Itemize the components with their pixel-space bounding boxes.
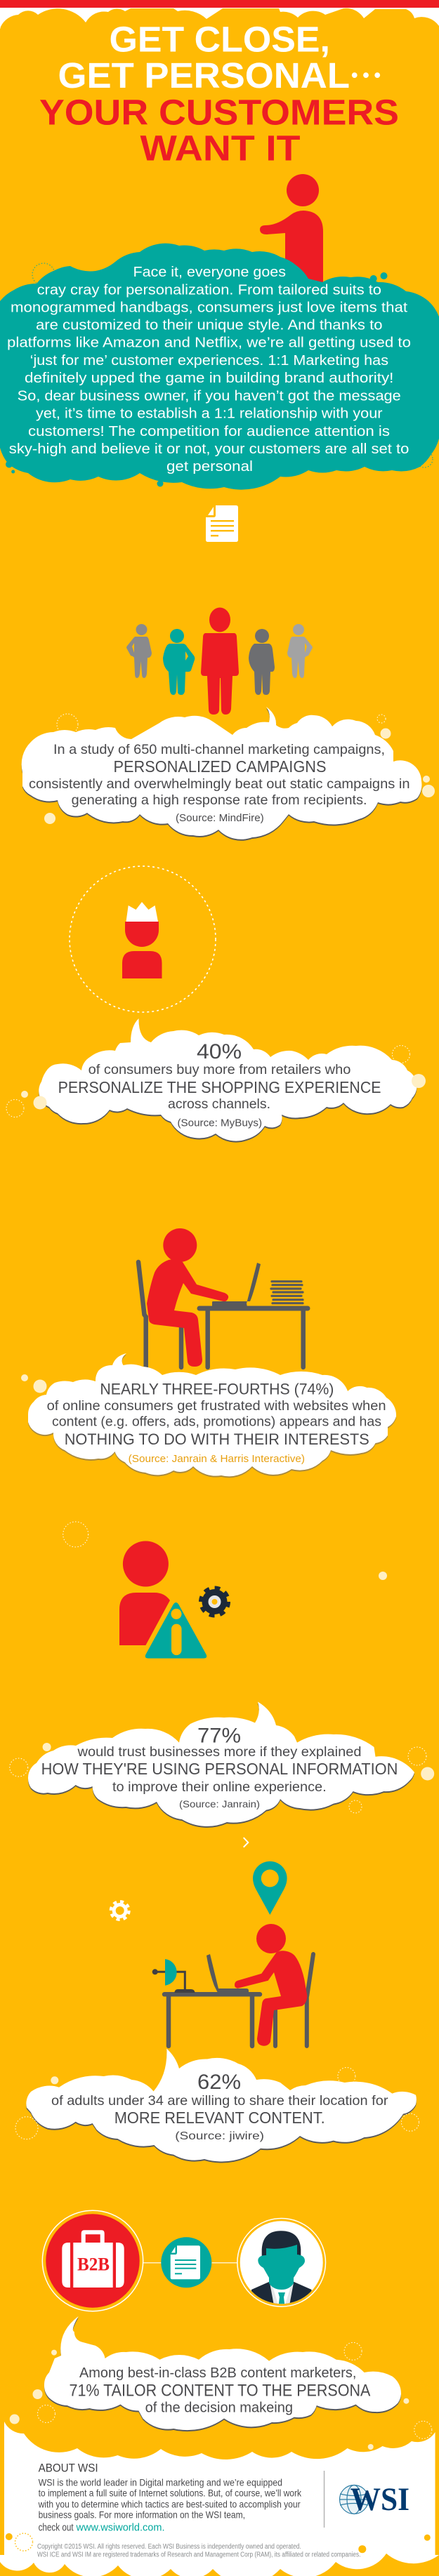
cloud text — [47, 1380, 386, 1465]
decorative dots: campaigns cloud — [44, 714, 435, 824]
face and neck — [258, 2245, 305, 2290]
copyright — [37, 2543, 360, 2558]
cloud text: to improve their online experience. — [112, 1779, 327, 1795]
intro paragraph: Face it, everyone goes — [133, 265, 286, 280]
suit — [251, 2281, 312, 2304]
diagram: B2B to document to persona — [42, 2210, 326, 2311]
cloud text: HOW THEY'RE USING PERSONAL INFORMATION — [41, 1760, 398, 1778]
title: WANT IT — [140, 128, 301, 168]
about paragraph: www.wsiworld.com. — [76, 2522, 164, 2534]
cloud text — [51, 2071, 388, 2142]
warning triangle — [145, 1602, 207, 1659]
about paragraph: WSI is the world leader in Digital marketing and we’re equipped — [39, 2477, 282, 2488]
person: gray left — [126, 624, 152, 678]
decorative dots: 62% cloud — [15, 2068, 419, 2139]
icon: teal location pin — [253, 1861, 287, 1915]
cloud text: 40% — [197, 1040, 242, 1063]
cloud text: PERSONALIZED CAMPAIGNS — [114, 757, 326, 776]
cloud text: (Source: MindFire) — [176, 812, 264, 824]
cloud text: 71% TAILOR CONTENT TO THE PERSONA — [69, 2381, 370, 2401]
intro paragraph: customers! The competition for audience attention is — [28, 424, 390, 439]
cloud text: would trust businesses more if they explained — [77, 1744, 361, 1760]
person: red — [201, 608, 239, 715]
cloud text: of consumers buy more from retailers who — [89, 1062, 351, 1077]
panel: 62% cloud — [26, 2049, 417, 2162]
person — [235, 1924, 307, 2046]
shirt — [270, 2283, 294, 2304]
logo: WSI globe: WSI — [350, 2481, 409, 2518]
decorative yellow dots on footer — [6, 2533, 431, 2553]
cloud text: NEARLY THREE-FOURTHS (74%) — [100, 1380, 334, 1398]
copyright: WSI ICE and WSI IM are registered trademarks of Research and Management Corp (RAM), its affiliated or related companies. — [37, 2551, 360, 2558]
icon: person at desk with laptop and books — [138, 1228, 308, 1367]
icon: white gear — [111, 1901, 129, 1920]
cloud text: 77% — [197, 1724, 241, 1748]
cloud text: 62% — [197, 2071, 241, 2094]
panel: 40% cloud — [39, 1018, 417, 1141]
about paragraph: to implement a full suite of Internet solutions. But, of course, we’ll work — [39, 2488, 302, 2499]
title — [39, 20, 399, 168]
person: light gray right — [287, 624, 313, 678]
about paragraph: with you to determine which tactics are best-suited to accomplish your — [38, 2498, 301, 2509]
decorative dots: three-fourths cloud — [21, 1374, 387, 1580]
icon: teal document circle — [161, 2237, 211, 2288]
cloud text: of online consumers get frustrated with websites when — [47, 1398, 386, 1414]
desk — [199, 1308, 308, 1367]
laptop — [212, 1263, 261, 1307]
intro paragraph: So, dear business owner, if you haven’t got the message — [18, 389, 401, 404]
person — [147, 1228, 228, 1367]
panel: 77% cloud — [28, 1701, 414, 1826]
panel: about WSI footer — [0, 2422, 439, 2576]
cloud text: consistently and overwhelmingly beat out static campaigns in — [29, 776, 410, 792]
intro paragraph: monogrammed handbags, consumers just love items that — [11, 300, 407, 316]
title: YOUR CUSTOMERS — [39, 93, 399, 132]
cloud text: (Source: Janrain & Harris Interactive) — [129, 1453, 305, 1465]
cloud text: (Source: MyBuys) — [177, 1117, 262, 1129]
about paragraph — [38, 2477, 302, 2534]
decorative dots: B2B cloud — [10, 2342, 432, 2450]
cloud text: content (e.g. offers, ads, promotions) appears and has — [52, 1414, 381, 1429]
cloud text: PERSONALIZE THE SHOPPING EXPERIENCE — [58, 1078, 381, 1096]
cloud text: Among best-in-class B2B content marketers, — [79, 2365, 356, 2381]
cloud text: (Source: jiwire) — [175, 2130, 264, 2142]
person: teal — [163, 629, 195, 695]
intro paragraph: cray cray for personalization. From tailored suits to — [37, 282, 381, 298]
desk — [164, 1994, 260, 2046]
intro paragraph: get personal — [166, 459, 253, 474]
cloud text: NOTHING TO DO WITH THEIR INTERESTS — [65, 1430, 369, 1448]
intro paragraph: yet, it’s time to establish a 1:1 relationship with your — [36, 406, 383, 421]
panel: B2B persona cloud — [44, 2316, 401, 2430]
decorative dots: 40% cloud — [6, 1046, 426, 1117]
cloud text: of adults under 34 are willing to share their location for — [51, 2093, 388, 2109]
intro paragraph: ‘just for me’ customer experiences. 1:1 Marketing has — [30, 353, 388, 369]
panel: three-fourths cloud — [28, 1353, 396, 1476]
laptop — [207, 1954, 249, 1993]
icon: person at desk with lamp and laptop — [152, 1924, 313, 2046]
icon: B2B suitcase circle: B2B — [77, 2254, 110, 2274]
icon: crowned customer in dashed circle — [70, 866, 216, 1012]
icon: persona portrait circle — [237, 2218, 326, 2309]
panel: personalized campaigns cloud — [22, 707, 421, 839]
cloud text: MORE RELEVANT CONTENT. — [114, 2109, 325, 2127]
cloud text: (Source: Janrain) — [179, 1798, 260, 1810]
copyright: Copyright ©2015 WSI. All rights reserved. Each WSI Business is independently owned and operated. — [37, 2543, 301, 2551]
intro paragraph: sky-high and believe it or not, your customers are all set to — [9, 441, 409, 457]
cloud text: In a study of 650 multi-channel marketing campaigns, — [53, 742, 385, 757]
icon: red person pointing — [260, 174, 323, 288]
icon: document — [206, 505, 238, 542]
icon: person with warning triangle — [119, 1541, 207, 1659]
about paragraph: business goals. For more information on the WSI team, — [39, 2509, 245, 2521]
panel: intro teal cloud — [0, 244, 439, 490]
cloud text — [41, 1724, 398, 1810]
cloud text — [69, 2365, 370, 2416]
intro paragraph: are customized to their unique style. And thanks to — [36, 317, 382, 333]
hair — [262, 2231, 301, 2257]
chair — [138, 1262, 181, 1367]
arrow: white chevron — [244, 1838, 248, 1847]
person: dark gray — [249, 629, 275, 695]
stack of books — [271, 1282, 303, 1303]
icon: B2B suitcase circle — [42, 2210, 143, 2311]
cloud text: generating a high response rate from recipients. — [72, 792, 367, 808]
tie — [278, 2292, 285, 2304]
cloud text — [58, 1040, 381, 1129]
intro paragraph: platforms like Amazon and Netflix, we’re all getting used to — [7, 336, 411, 351]
connector lines — [143, 2262, 237, 2264]
header: red bar and scalloped edge — [0, 0, 439, 29]
intro paragraph — [7, 265, 411, 474]
chair — [275, 1954, 313, 2046]
decorative dots around intro cloud — [6, 263, 433, 487]
cloud text: of the decision makeing — [145, 2401, 293, 2416]
cloud text — [29, 742, 410, 824]
icon: dark gear — [201, 1588, 229, 1616]
icon: group of people with red person standing out — [126, 608, 313, 715]
about paragraph: check out — [39, 2522, 74, 2534]
desk lamp — [152, 1959, 195, 1993]
about heading: ABOUT WSI — [39, 2462, 98, 2475]
title: GET CLOSE, — [110, 20, 330, 59]
intro paragraph: definitely upped the game in building brand authority! — [25, 371, 393, 386]
cloud text: across channels. — [168, 1096, 270, 1112]
decorative dots: 77% cloud — [10, 1743, 434, 1813]
title: GET PERSONAL — [58, 55, 350, 95]
title: ••• — [351, 65, 381, 86]
